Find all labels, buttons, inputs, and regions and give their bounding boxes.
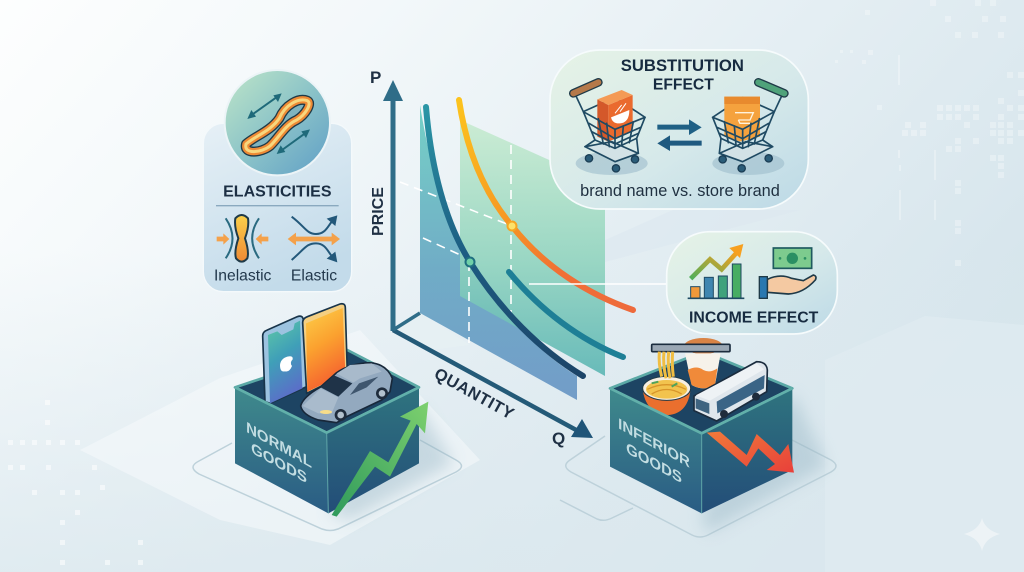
box: inferior goods	[610, 338, 827, 533]
shadow	[702, 393, 827, 533]
curve: teal demand	[509, 272, 623, 357]
shaded plane under demand curve	[420, 105, 577, 400]
heading: substitution effect	[621, 56, 744, 93]
panel card	[203, 123, 352, 292]
box right face	[327, 387, 419, 513]
heading: elasticities: ELASTICITIES	[223, 184, 332, 201]
icon: cup noodles	[652, 338, 730, 388]
panel: income effect	[667, 232, 837, 334]
icon: sparkle	[964, 518, 1000, 551]
icon: bus	[694, 362, 767, 421]
label: inferior goods: GOODS	[626, 439, 682, 487]
icon: phones	[263, 304, 347, 403]
dashed guide lines	[400, 145, 511, 343]
caption: brand name vs store brand: brand name vs. store brand	[580, 182, 780, 200]
floor plates	[193, 436, 836, 537]
connector line to income effect	[529, 283, 668, 285]
point: yellow	[508, 222, 516, 230]
icon: inelastic	[217, 215, 268, 262]
label: normal goods: GOODS	[251, 439, 307, 487]
x axis with arrow	[393, 313, 593, 438]
label: elastic: Elastic	[291, 268, 337, 285]
panel: substitution effect	[550, 50, 808, 209]
box right face	[702, 388, 792, 513]
curve: shifted demand orange	[459, 100, 633, 310]
label: inferior goods: INFERIOR	[618, 415, 690, 472]
icon: money in hand	[759, 248, 816, 298]
label: inelastic: Inelastic	[214, 268, 272, 285]
y axis with arrow	[383, 80, 403, 331]
icon: elastic	[288, 215, 340, 262]
box: normal goods	[235, 304, 453, 520]
heading: substitution effect: EFFECT	[653, 76, 714, 93]
icon: rising bars	[688, 244, 744, 298]
icon: noodle bowl	[643, 352, 691, 415]
axis label Q: Q	[552, 429, 565, 448]
chart: price vs quantity curves	[370, 68, 668, 448]
axis label QUANTITY: QUANTITY	[431, 365, 517, 423]
label: normal goods: NORMAL	[246, 419, 312, 472]
axis label PRICE: PRICE	[370, 187, 387, 236]
icon: rubber band circle	[225, 70, 330, 175]
point: green	[466, 258, 474, 266]
floor triangle of plot	[395, 313, 470, 350]
heading: substitution effect: SUBSTITUTION	[621, 56, 744, 75]
arrow: rising green	[332, 402, 428, 517]
arrows: swap	[657, 119, 702, 151]
heading: income effect: INCOME EFFECT	[689, 310, 819, 327]
box left face	[610, 388, 702, 513]
shadow	[328, 407, 453, 520]
box interior	[235, 350, 419, 433]
icon: car	[301, 363, 392, 423]
curve: original demand	[426, 107, 583, 376]
panel: elasticities	[203, 70, 352, 292]
bubble	[667, 232, 837, 334]
icon: store brand cart	[712, 82, 784, 175]
box left face	[235, 387, 328, 513]
arrow: falling red	[707, 432, 794, 473]
shaded plane: green	[460, 120, 605, 376]
bubble	[550, 50, 808, 209]
icon: brand name cart	[573, 82, 648, 175]
axis label P: P	[370, 68, 381, 87]
box interior	[610, 352, 792, 433]
